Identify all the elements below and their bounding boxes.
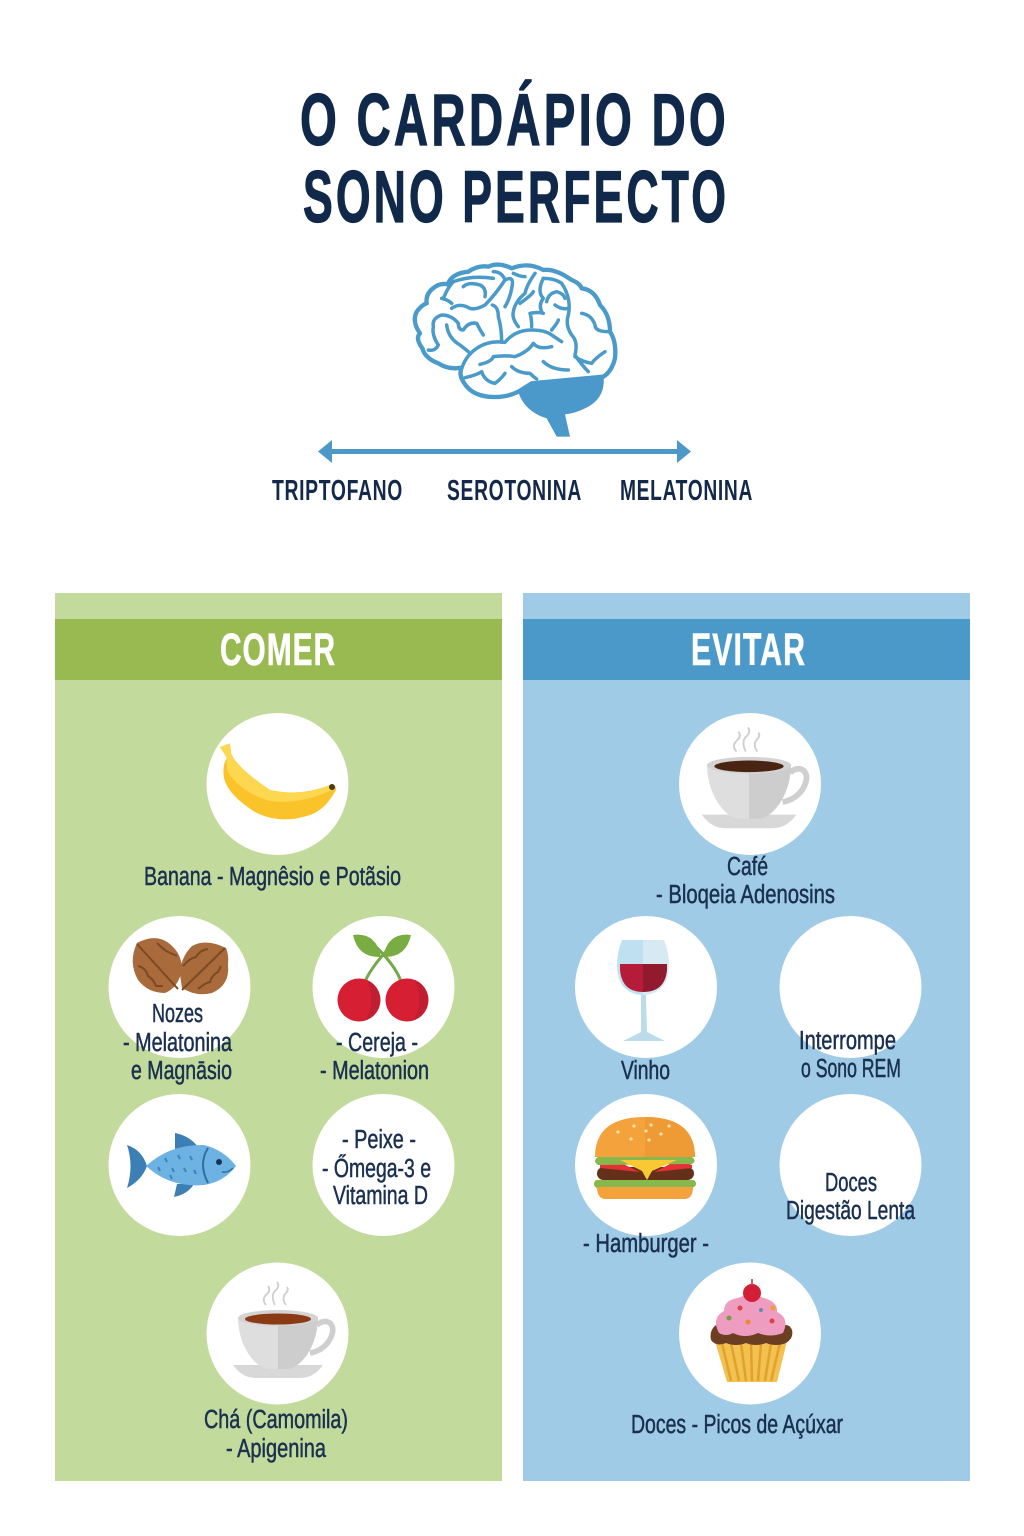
item: cereja: - Melatonion — [320, 1057, 429, 1085]
title: SONO PERFECTO — [303, 157, 729, 238]
item: cereja: - Cereja - — [336, 1029, 418, 1057]
item: peixe text — [312, 1094, 454, 1236]
item: chá: - Apigenina — [226, 1435, 327, 1463]
item: cupcake: Doces - Picos de Açúxar — [631, 1411, 843, 1439]
panel: comer — [55, 593, 502, 1481]
item: chá — [204, 1262, 348, 1463]
pathway labels — [272, 475, 753, 507]
icon: brain — [415, 265, 615, 437]
item: banana: Banana - Magnêsio e Potãsio — [144, 863, 401, 891]
item: hamburger: - Hamburger - — [583, 1230, 709, 1258]
arrow: two-way pathway — [318, 440, 691, 463]
heading: evitar: EVITAR — [691, 624, 806, 675]
item: café: Café — [727, 853, 768, 881]
item: café: - Bloqeia Adenosins — [656, 881, 835, 909]
title: O CARDÁPIO DO — [300, 80, 729, 161]
pathway labels: MELATONINA — [620, 475, 753, 507]
item: peixe text: - Peixe - — [342, 1126, 416, 1154]
item: doces text: Digestão Lenta — [786, 1197, 916, 1225]
item: doces text — [780, 1094, 922, 1236]
pathway labels: SEROTONINA — [447, 475, 582, 507]
item: nozes: e Magnāsio — [131, 1057, 232, 1085]
item: nozes: - Melatonina — [123, 1029, 233, 1057]
item: álcool text — [780, 916, 922, 1083]
panel: evitar — [523, 593, 970, 1481]
item: álcool text: o Sono REM — [801, 1055, 901, 1083]
item: vinho: Vinho — [621, 1057, 670, 1085]
item: banana — [144, 713, 401, 891]
item: peixe text: - Őmega-3 e — [322, 1154, 431, 1183]
item: cereja — [312, 916, 454, 1085]
item: nozes — [108, 916, 250, 1085]
item: doces text: Doces — [825, 1169, 877, 1197]
pathway labels: TRIPTOFANO — [272, 475, 403, 507]
heading: comer: COMER — [220, 624, 336, 675]
item: cupcake — [631, 1262, 843, 1439]
item: peixe text: Vitamina D — [333, 1182, 428, 1210]
item: peixe icon — [108, 1094, 250, 1236]
item: hamburger — [575, 1094, 717, 1258]
item: nozes: Nozes — [152, 1000, 203, 1028]
title — [300, 80, 729, 238]
item: álcool text: Interrompe — [799, 1027, 896, 1055]
item: café — [656, 713, 835, 909]
item: chá: Chá (Camomila) — [204, 1406, 348, 1434]
item: vinho — [575, 916, 717, 1085]
